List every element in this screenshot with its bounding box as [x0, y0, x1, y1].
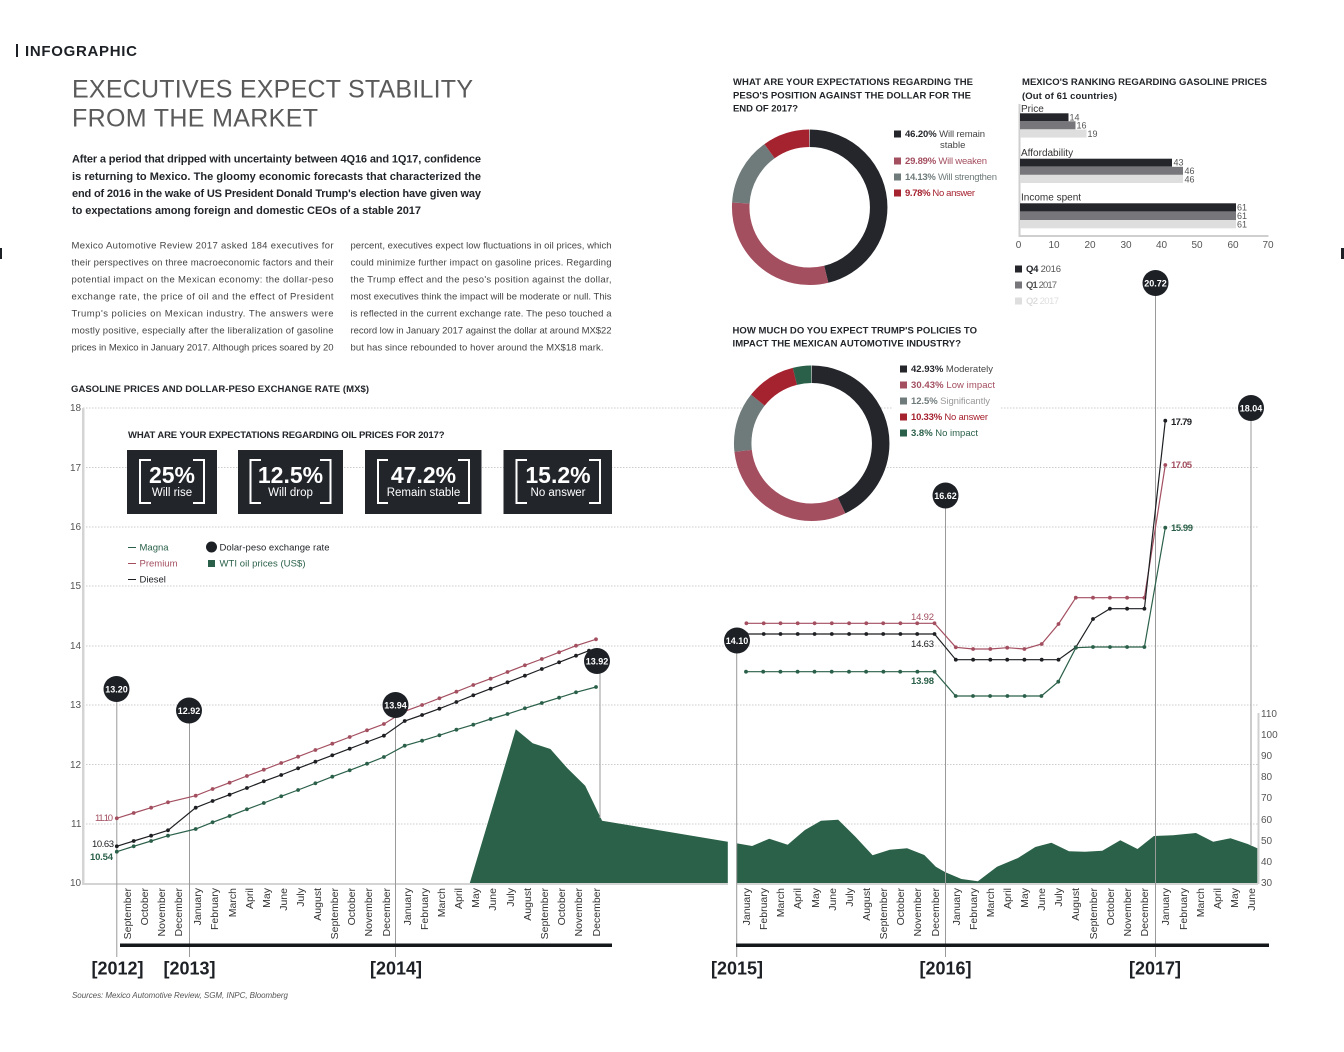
month labels 2015-2017: February: [968, 887, 980, 930]
month labels 2012-2014: June: [487, 888, 499, 911]
body text column 2: could minimize further impact on gasoline prices. Regarding: [350, 257, 612, 268]
bar chart: gasoline ranking: Income spent: [1021, 192, 1081, 204]
stat box: no answer: [504, 450, 612, 514]
chart legend: WTI oil prices (US$): [220, 558, 306, 570]
month labels 2015-2017: March: [1195, 888, 1207, 917]
chart legend: Premium: [140, 558, 178, 570]
body text column 1: [72, 240, 334, 353]
month labels 2015-2017: September: [1088, 888, 1100, 939]
value labels on lines: 10.63: [92, 839, 114, 850]
title: [72, 76, 473, 132]
chart gridlines and y axis: [70, 403, 1258, 889]
body text column 2: most executives think the impact will be moderate or null. This: [350, 291, 612, 302]
month labels 2015-2017: January: [1160, 887, 1172, 925]
chart legend: [128, 542, 330, 586]
bar chart: gasoline ranking: 10: [1048, 240, 1060, 251]
exchange rate bubbles: 12.92: [178, 706, 200, 716]
value labels on lines: 14.92: [911, 612, 934, 623]
month labels 2012-2014: March: [227, 888, 239, 917]
secondary axis: oil price scale: 80: [1261, 772, 1273, 783]
month labels 2015-2017: July: [844, 887, 856, 907]
line: magna 2012-2014: [117, 687, 596, 852]
year labels: [91, 958, 1181, 978]
donut legend: Trump policies: 10.33% No answer: [911, 412, 988, 423]
month labels 2012-2014: July: [505, 887, 517, 907]
bar chart: gasoline ranking: 19: [1088, 129, 1098, 139]
intro paragraph: end of 2016 in the wake of US President Donald Trump's election have given way: [72, 188, 482, 200]
donut legend: peso expectations: 14.13% Will strengthen: [905, 172, 997, 183]
exchange rate bubbles: 13.94: [384, 700, 407, 710]
month labels 2015-2017: January: [741, 887, 753, 925]
month labels 2012-2014: June: [278, 888, 290, 911]
bar chart: gasoline ranking: [1016, 104, 1274, 251]
chart gridlines and y axis: 15: [70, 581, 82, 592]
donut legend: Trump policies: [900, 364, 995, 439]
donut legend: Trump policies: 3.8% No impact: [911, 428, 978, 439]
body text column 1: Trump's policies on Mexican industry. The answers were: [72, 308, 334, 319]
stat box: will drop: [238, 450, 343, 514]
line: premium 2012-2014: [117, 639, 596, 818]
secondary axis: oil price scale: 60: [1261, 815, 1273, 826]
month labels 2012-2014: September: [329, 888, 341, 939]
bar chart: gasoline ranking: 0: [1016, 240, 1022, 251]
timeline bars: [120, 944, 1269, 947]
month labels 2015-2017: May: [810, 887, 822, 908]
intro paragraph: to expectations among foreign and domestic CEOs of a stable 2017: [72, 205, 421, 217]
month labels 2015-2017: March: [775, 888, 787, 917]
oil prices heading: WHAT ARE YOUR EXPECTATIONS REGARDING OIL PRICES FOR 2017?: [128, 430, 445, 441]
month labels 2012-2014: August: [312, 888, 324, 921]
donut legend: Trump policies: 30.43% Low impact: [911, 380, 995, 391]
area: WTI oil prices 2012-2014: [470, 729, 728, 883]
month labels 2012-2014: November: [363, 887, 375, 936]
chart gridlines and y axis: 10: [70, 878, 82, 889]
body text column 1: exchange rate, the price of oil and the effect of President: [72, 291, 334, 302]
heading: gasoline ranking: MEXICO'S RANKING REGARDING GASOLINE PRICES: [1022, 77, 1267, 88]
bar chart: gasoline ranking: 61: [1237, 211, 1247, 221]
bar chart: gasoline ranking: Affordability: [1021, 148, 1073, 159]
month labels 2015-2017: March: [985, 888, 997, 917]
month labels 2015-2017: [741, 887, 1258, 939]
value labels on lines: 10.54: [90, 852, 114, 863]
chart legend: Dolar-peso exchange rate: [220, 542, 330, 554]
exchange rate bubbles: 14.10: [726, 636, 748, 646]
body text column 2: is reflected in the current exchange rate. The peso touched a: [350, 308, 612, 319]
month labels 2015-2017: April: [792, 888, 804, 909]
month labels 2012-2014: December: [173, 887, 185, 936]
donut legend: Trump policies: 42.93% Moderately: [911, 364, 993, 375]
month labels 2012-2014: May: [470, 887, 482, 908]
month labels 2015-2017: December: [930, 887, 942, 936]
body text column 2: but has since rebounded to hover around the MX$18 mark.: [350, 342, 604, 353]
bar chart: gasoline ranking: 46: [1184, 166, 1195, 176]
stat box: no answer: 15.2%: [525, 462, 591, 488]
chart legend: Magna: [140, 542, 169, 554]
exchange rate bubbles: 16.62: [934, 491, 957, 501]
area: WTI oil prices 2015-2017: [736, 820, 1257, 883]
body text column 1: prices in Mexico in January 2017. Although prices soared by 20: [72, 342, 334, 353]
month labels 2012-2014: July: [295, 887, 307, 907]
month labels 2015-2017: August: [861, 888, 873, 921]
month labels 2015-2017: November: [1122, 887, 1134, 936]
sources: Sources: Mexico Automotive Review, SGM, INPC, Bloomberg: [72, 991, 289, 1000]
body text column 2: the Trump effect and the peso's position against the dollar,: [350, 274, 612, 285]
month labels 2015-2017: June: [1036, 888, 1048, 911]
month labels 2012-2014: October: [556, 888, 568, 925]
bar chart: gasoline ranking: 16: [1076, 120, 1087, 130]
month labels 2012-2014: May: [261, 887, 273, 908]
stat box: remain stable: 47.2%: [391, 462, 456, 488]
stat box: will drop: 12.5%: [258, 462, 323, 488]
month labels 2015-2017: July: [1053, 887, 1065, 907]
bar chart: gasoline ranking: 43: [1174, 158, 1184, 168]
month labels 2012-2014: September: [122, 888, 134, 939]
stat box: no answer: No answer: [531, 487, 586, 499]
line: premium 2015-2017: [746, 465, 1165, 649]
secondary axis: oil price scale: 100: [1261, 730, 1278, 741]
year labels: [2017]: [1129, 958, 1181, 978]
year labels: [2012]: [91, 958, 144, 978]
exchange rate bubbles: 13.20: [105, 684, 128, 694]
bar chart: gasoline ranking: 40: [1156, 240, 1167, 251]
month labels 2015-2017: December: [1139, 887, 1151, 936]
title: FROM THE MARKET: [72, 104, 318, 132]
donut chart: Trump policies: [743, 374, 881, 512]
month labels 2012-2014: December: [381, 887, 393, 936]
secondary axis: oil price scale: [1258, 709, 1278, 889]
month labels 2012-2014: April: [244, 888, 256, 909]
bar chart legend: Q4 2016: [1026, 264, 1061, 275]
secondary axis: oil price scale: 50: [1261, 836, 1273, 847]
year labels: [2014]: [370, 958, 422, 978]
exchange rate bubbles: [104, 270, 1264, 724]
month labels 2012-2014: April: [453, 888, 465, 909]
month labels 2015-2017: September: [878, 888, 890, 939]
month labels 2015-2017: August: [1070, 888, 1082, 921]
stat box: will rise: Will rise: [152, 487, 192, 499]
bar chart: gasoline ranking: 61: [1237, 220, 1247, 230]
value labels on lines: 15.99: [1171, 523, 1193, 534]
secondary axis: oil price scale: 30: [1261, 878, 1273, 889]
body text column 1: Mexico Automotive Review 2017 asked 184 executives for: [72, 240, 334, 251]
bar chart: gasoline ranking: 50: [1191, 240, 1203, 251]
bar chart: gasoline ranking: 30: [1120, 240, 1132, 251]
month labels 2012-2014: December: [591, 887, 603, 936]
month labels 2015-2017: April: [1212, 888, 1224, 909]
chart gridlines and y axis: 11: [71, 819, 82, 830]
month labels 2015-2017: February: [1178, 887, 1190, 930]
intro paragraph: [72, 154, 482, 217]
heading: gasoline ranking: [1022, 77, 1267, 102]
stat box: remain stable: Remain stable: [387, 487, 460, 499]
body text column 2: [350, 240, 612, 353]
value labels on lines: 11.10: [95, 813, 113, 824]
donut legend: peso expectations: 9.78% No answer: [905, 188, 975, 199]
heading: gasoline ranking: (Out of 61 countries): [1022, 91, 1117, 102]
month labels 2012-2014: November: [573, 887, 585, 936]
donut legend: Trump policies: 12.5% Significantly: [911, 396, 990, 407]
bar chart legend: Q1 2017: [1026, 280, 1057, 291]
heading: Trump policies question: IMPACT THE MEXICAN AUTOMOTIVE INDUSTRY?: [732, 339, 961, 350]
bar chart: gasoline ranking: 70: [1262, 240, 1274, 251]
month labels 2015-2017: June: [1246, 888, 1258, 911]
chart gridlines and y axis: 13: [70, 700, 82, 711]
intro paragraph: After a period that dripped with uncertainty between 4Q16 and 1Q17, confidence: [72, 154, 481, 166]
section label: infographic: INFOGRAPHIC: [25, 43, 137, 60]
month labels 2015-2017: February: [758, 887, 770, 930]
month labels 2015-2017: June: [827, 888, 839, 911]
bar chart legend: [1015, 264, 1061, 307]
chart gridlines and y axis: 14: [70, 641, 82, 652]
value labels on lines: 17.79: [1171, 417, 1192, 428]
month labels 2015-2017: January: [951, 887, 963, 925]
month labels 2012-2014: November: [156, 887, 168, 936]
month labels 2015-2017: April: [1002, 888, 1014, 909]
chart legend: Diesel: [140, 574, 166, 586]
value labels on lines: 13.98: [911, 676, 934, 687]
body text column 1: mostly positive, especially after the liberalization of gasoline: [72, 325, 334, 336]
body text column 1: potential impact on the Mexican economy: the dollar-peso: [72, 274, 334, 285]
bar chart: gasoline ranking: 46: [1184, 174, 1195, 184]
bar chart: gasoline ranking: 14: [1070, 112, 1080, 122]
year labels: [2016]: [919, 958, 972, 978]
heading: peso question: [733, 77, 973, 115]
chart gridlines and y axis: 12: [70, 760, 82, 771]
body text column 1: their perspectives on three macroeconomic factors and their: [72, 257, 334, 268]
month labels 2012-2014: [122, 887, 603, 939]
value labels on lines: [90, 417, 1193, 863]
stat box: will rise: [127, 450, 217, 514]
month labels 2015-2017: October: [895, 888, 907, 925]
body text column 2: percent, executives expect low fluctuations in oil prices, which: [350, 240, 612, 251]
chart gridlines and y axis: 18: [70, 403, 82, 414]
year labels: [2013]: [163, 958, 216, 978]
event marker stems: [117, 292, 1251, 957]
line: diesel 2012-2014: [117, 651, 589, 846]
month labels 2012-2014: August: [522, 888, 534, 921]
secondary axis: oil price scale: 70: [1261, 793, 1273, 804]
title: EXECUTIVES EXPECT STABILITY: [72, 76, 473, 104]
month labels 2012-2014: January: [192, 887, 204, 925]
donut legend: peso expectations: 46.20% Will remain: [905, 129, 985, 140]
intro paragraph: is returning to Mexico. The gloomy economic forecasts that characterized the: [72, 171, 481, 183]
line: magna 2015-2017: [746, 528, 1165, 696]
month labels 2015-2017: May: [1019, 887, 1031, 908]
secondary axis: oil price scale: 40: [1261, 857, 1273, 868]
value labels on lines: 14.63: [911, 639, 934, 650]
heading: peso question: WHAT ARE YOUR EXPECTATIONS REGARDING THE: [733, 77, 973, 88]
body text column 2: record low in January 2017 against the dollar at around MX$22: [350, 325, 612, 336]
heading: Trump policies question: HOW MUCH DO YOU EXPECT TRUMP'S POLICIES TO: [732, 325, 977, 336]
bar chart: gasoline ranking: 60: [1227, 240, 1239, 251]
donut legend: peso expectations: [894, 129, 997, 199]
stat box: will rise: 25%: [149, 462, 195, 488]
bar chart: gasoline ranking: 61: [1237, 202, 1247, 212]
exchange rate bubbles: 18.04: [1240, 403, 1262, 413]
month labels 2012-2014: January: [402, 887, 414, 925]
heading: peso question: PESO'S POSITION AGAINST THE DOLLAR FOR THE: [733, 91, 971, 102]
value labels on lines: 17.05: [1171, 460, 1193, 471]
month labels 2015-2017: May: [1229, 887, 1241, 908]
month labels 2015-2017: November: [912, 887, 924, 936]
stat box: will drop: Will drop: [268, 487, 313, 499]
line: diesel 2015-2017: [746, 421, 1165, 660]
year labels: [2015]: [711, 958, 763, 978]
month labels 2012-2014: February: [419, 887, 431, 930]
secondary axis: oil price scale: 110: [1261, 709, 1277, 720]
bar chart: gasoline ranking: 20: [1084, 240, 1096, 251]
month labels 2012-2014: March: [436, 888, 448, 917]
month labels 2012-2014: October: [346, 888, 358, 925]
exchange rate bubbles: 13.92: [586, 656, 608, 666]
bar chart legend: Q2 2017: [1026, 296, 1059, 307]
month labels 2012-2014: February: [209, 887, 221, 930]
heading: Trump policies question: [732, 325, 977, 350]
chart gridlines and y axis: 16: [70, 522, 82, 533]
month labels 2015-2017: October: [1105, 888, 1117, 925]
exchange rate bubbles: 20.72: [1144, 278, 1167, 288]
secondary axis: oil price scale: 90: [1261, 751, 1273, 762]
bar chart: gasoline ranking: Price: [1021, 104, 1044, 115]
month labels 2012-2014: October: [139, 888, 151, 925]
month labels 2012-2014: September: [539, 888, 551, 939]
stat box: remain stable: [365, 450, 482, 514]
chart gridlines and y axis: 17: [70, 463, 82, 474]
chart heading: GASOLINE PRICES AND DOLLAR-PESO EXCHANGE RATE (MX$): [71, 384, 369, 395]
donut chart: peso expectations: [741, 138, 879, 276]
donut legend: peso expectations: 29.89% Will weaken: [905, 156, 987, 167]
donut legend: peso expectations: stable: [940, 140, 965, 151]
heading: peso question: END OF 2017?: [733, 104, 798, 115]
